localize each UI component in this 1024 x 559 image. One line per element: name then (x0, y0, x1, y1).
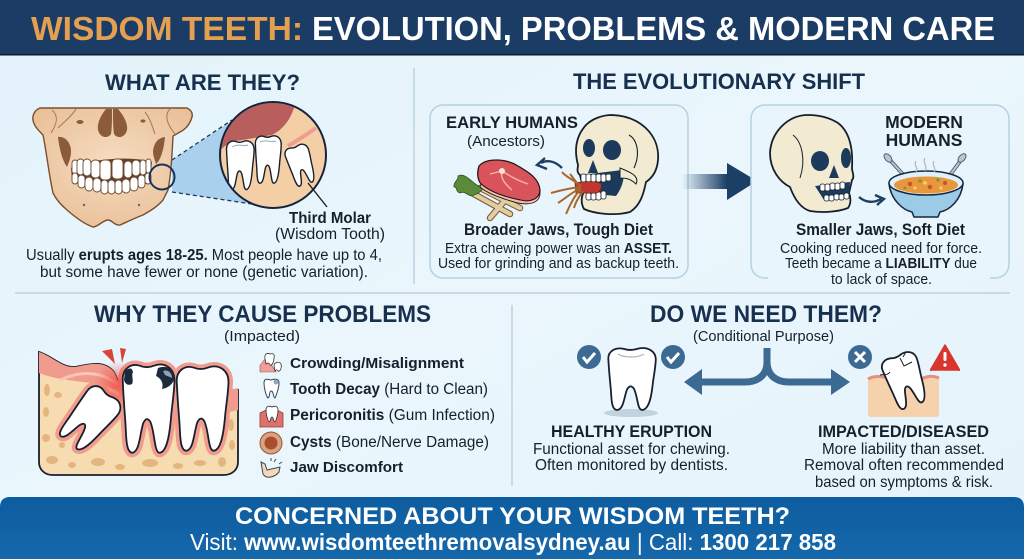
zoom ring on jaw (150, 164, 174, 190)
panel: what are they (26, 70, 385, 281)
decayed second molar (123, 365, 174, 453)
arrow: skull to soup (859, 195, 884, 205)
icon: impacted tooth in gum (868, 349, 939, 417)
heading: why they cause problems: WHY THEY CAUSE PROBLEMS (94, 301, 431, 328)
text: impacted or diseased (804, 422, 1004, 491)
zoom cone (172, 120, 252, 204)
heading: do we need them: DO WE NEED THEM? (650, 301, 882, 328)
text: impacted or diseased: Removal often recommended (804, 457, 1004, 474)
list: problems (260, 354, 495, 477)
item: tooth decay: Tooth Decay (Hard to Clean) (290, 381, 488, 398)
text: smaller jaws: Teeth became a LIABILITY due (785, 256, 977, 272)
text: healthy eruption: Functional asset for chewing. (533, 441, 730, 458)
heading: evolutionary shift: THE EVOLUTIONARY SHIFT (573, 69, 866, 94)
title banner (0, 0, 1024, 56)
magnified molars (220, 100, 326, 210)
text: smaller jaws: Smaller Jaws, Soft Diet (796, 220, 965, 239)
callout: third molar (275, 183, 385, 243)
text: impacted or diseased: based on symptoms & risk. (815, 474, 993, 491)
text: impacted or diseased: IMPACTED/DISEASED (818, 422, 989, 441)
text: healthy eruption: HEALTHY ERUPTION (551, 422, 712, 441)
subheading: conditional purpose: (Conditional Purpose) (693, 328, 834, 345)
impacted wisdom tooth (55, 382, 125, 456)
arrow: food to mouth (537, 158, 562, 169)
arrow: branching outcomes (684, 348, 850, 395)
illustration: front skull with jaw (33, 108, 192, 227)
icon: raw meat and roots (454, 160, 540, 218)
text: broader jaws: Extra chewing power was an ASSET. (445, 241, 672, 257)
text: eruption facts: Usually erupts ages 18-25. Most people have up to 4, (26, 247, 382, 264)
panel: why they cause problems (39, 301, 495, 477)
card: early humans (430, 105, 688, 278)
title banner: WISDOM TEETH: (31, 10, 303, 47)
card: modern humans: HUMANS (886, 130, 962, 150)
icon: modern skull (770, 115, 853, 212)
icon: pain marks (102, 348, 126, 364)
icon: check left (577, 345, 601, 369)
arrow: early to modern (682, 163, 757, 200)
icon: healthy tooth (604, 348, 658, 417)
healthy molar (177, 366, 228, 451)
card: early humans: EARLY HUMANS (446, 113, 578, 132)
card: modern humans (751, 105, 1009, 288)
text: impacted or diseased: More liability than asset. (822, 441, 985, 458)
subheading: impacted: (Impacted) (224, 328, 300, 345)
text: broader jaws: Used for grinding and as backup teeth. (438, 256, 679, 272)
panel: evolutionary shift (430, 69, 1009, 288)
icon: bowl of soup (882, 152, 968, 217)
callout: third molar: (Wisdom Tooth) (275, 226, 385, 243)
icon: warning triangle (931, 345, 959, 370)
illustration: impacted tooth cross-section (39, 352, 238, 475)
panel: do we need them (533, 301, 1004, 491)
item: jaw discomfort: Jaw Discomfort (290, 459, 403, 476)
icon: early skull (551, 115, 658, 214)
item: cysts: Cysts (Bone/Nerve Damage) (290, 434, 489, 451)
item: pericoronitis: Pericoronitis (Gum Infection) (290, 407, 495, 424)
heading: what are they: WHAT ARE THEY? (105, 70, 300, 95)
item: crowding: Crowding/Misalignment (290, 355, 464, 372)
text: healthy eruption (533, 422, 730, 474)
text: eruption facts (26, 247, 382, 281)
item: cysts (260, 432, 489, 454)
text: smaller jaws: to lack of space. (831, 272, 932, 288)
footer call to action: CONCERNED ABOUT YOUR WISDOM TEETH? (235, 503, 790, 530)
text: broader jaws (438, 220, 679, 272)
title banner: EVOLUTION, PROBLEMS & MODERN CARE (312, 10, 995, 47)
icon: cross (848, 345, 872, 369)
text: smaller jaws: Cooking reduced need for force. (780, 241, 982, 257)
text: broader jaws: Broader Jaws, Tough Diet (464, 220, 653, 239)
text: smaller jaws (780, 220, 982, 288)
card: early humans: (Ancestors) (467, 133, 545, 150)
text: eruption facts: but some have fewer or none (genetic variation). (40, 264, 368, 281)
item: jaw discomfort (261, 458, 403, 477)
icon: check right (661, 345, 685, 369)
footer call to action: Visit: www.wisdomteethremovalsydney.au | Call: 1300 217 858 (190, 529, 836, 555)
card: modern humans: MODERN (885, 112, 963, 132)
callout: third molar: Third Molar (289, 210, 371, 227)
footer call to action (0, 497, 1024, 559)
text: healthy eruption: Often monitored by dentists. (535, 457, 728, 474)
